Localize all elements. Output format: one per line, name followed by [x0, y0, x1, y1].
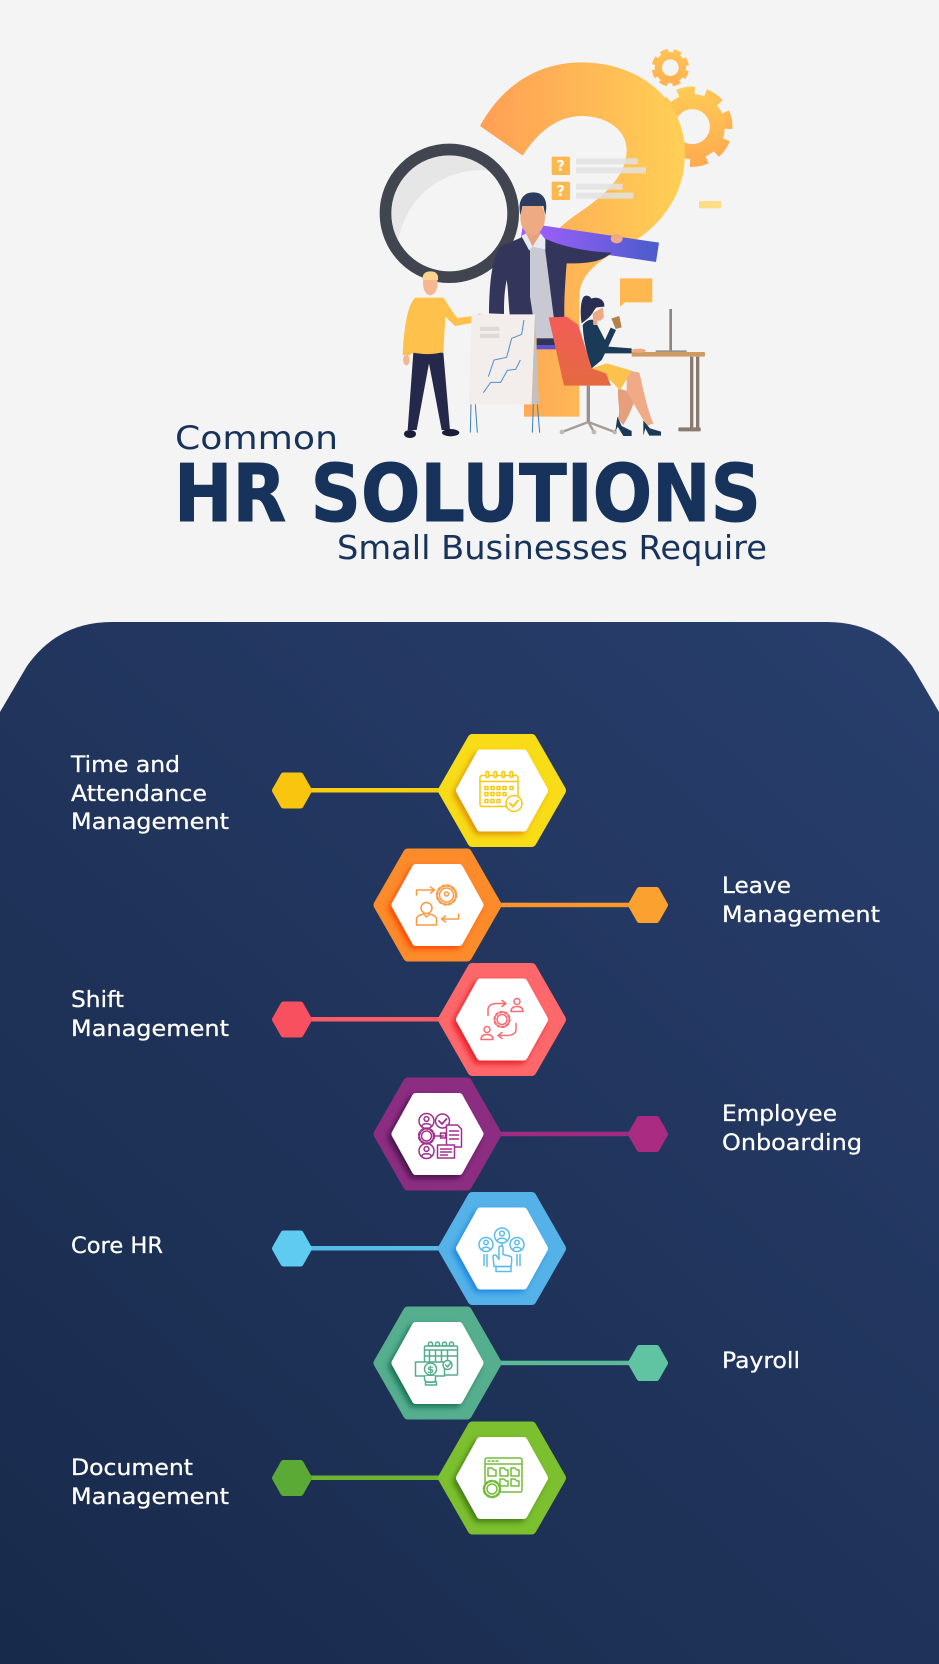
office chair [560, 386, 617, 434]
item: Employee Onboarding [378, 1082, 862, 1186]
illustration: HR team with question mark [385, 48, 740, 438]
decorative dash [699, 201, 721, 208]
label [71, 1456, 229, 1510]
icon: onboarding workflow [419, 1114, 462, 1158]
icon: small gear [651, 48, 690, 87]
icon: payroll calendar and money [416, 1342, 458, 1385]
label: Shift [71, 988, 124, 1013]
item: Document Management [71, 1426, 561, 1530]
question mark [480, 62, 685, 417]
title [174, 419, 767, 567]
icon: employee with gear and arrows [416, 886, 458, 925]
label: Payroll [722, 1349, 800, 1374]
label: Management [722, 903, 880, 928]
heading line: Common: Common [175, 419, 338, 457]
heading line: Small Businesses Require: Small Businesses Require [337, 528, 767, 567]
icon: document folders with gear [483, 1458, 522, 1498]
label: Document [71, 1456, 193, 1481]
question list: ? [556, 158, 565, 175]
icon: payroll calendar and money: $ [427, 1365, 434, 1376]
speech bubble [620, 278, 652, 307]
flipchart [469, 314, 540, 433]
label: Management [71, 1485, 229, 1510]
label [722, 1102, 862, 1156]
icon: people exchange with gear [481, 998, 523, 1040]
item: Shift Management [71, 968, 561, 1071]
chair seat and back [549, 317, 611, 386]
heading line: HR SOLUTIONS: HR SOLUTIONS [174, 448, 761, 540]
item: Core HR [71, 1197, 561, 1300]
question list: ? [556, 183, 565, 200]
item: Time and Attendance Management [70, 739, 561, 842]
man in yellow sweater [403, 271, 486, 438]
panel: dark blue background [0, 622, 939, 1664]
label: Core HR [71, 1234, 163, 1259]
question list [552, 157, 646, 200]
label: Leave [722, 874, 791, 899]
label [71, 988, 229, 1042]
label [722, 874, 880, 928]
magnifier [385, 149, 659, 277]
label: Onboarding [722, 1131, 862, 1156]
icon: hand selecting people [479, 1228, 524, 1272]
item: Payroll [378, 1312, 800, 1414]
icon: calendar with check [480, 772, 522, 812]
icon: large gear [645, 79, 740, 174]
desk [632, 309, 705, 431]
man in suit [489, 192, 623, 349]
label: Management [71, 810, 229, 835]
label [70, 753, 229, 835]
item: Leave Management [378, 854, 880, 956]
woman at desk [581, 296, 661, 436]
label: Management [71, 1017, 229, 1042]
label: Attendance [71, 782, 207, 807]
label: Employee [722, 1102, 837, 1127]
label: Time and [70, 753, 180, 778]
